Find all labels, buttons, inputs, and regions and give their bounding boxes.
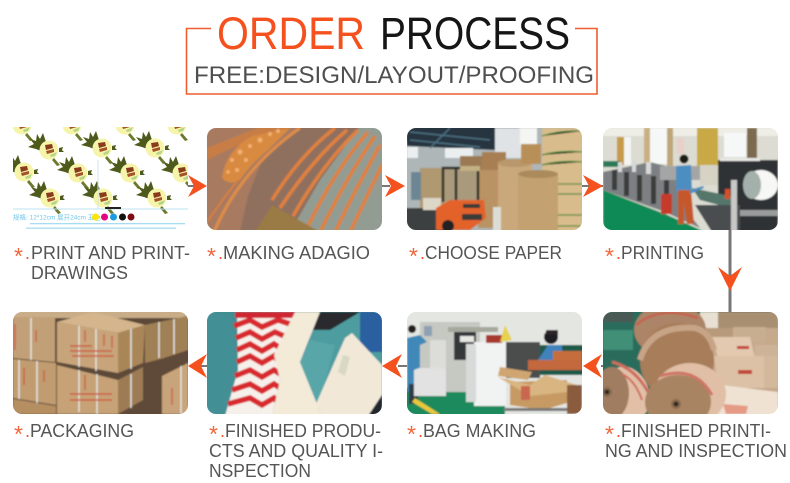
- arrow: step 4 down to 5: [718, 230, 742, 312]
- panel: print and print drawings: [13, 127, 190, 279]
- panel: making adagio: [207, 128, 382, 259]
- photo: warehouse with paper rolls: [405, 126, 585, 232]
- label: PRINTING: [621, 243, 704, 263]
- label: [209, 421, 383, 481]
- panel: packaging: [13, 312, 188, 437]
- photo: pineapple print drawing: [13, 127, 188, 229]
- label: *: [407, 421, 416, 447]
- label: *: [409, 243, 418, 269]
- arrow: step 6 to 7: [382, 354, 407, 378]
- label: NG AND INSPECTION: [605, 441, 787, 461]
- label: .: [616, 243, 621, 263]
- label: [14, 243, 190, 283]
- label: .: [220, 421, 225, 441]
- label: [605, 243, 704, 269]
- arrow: step 5 to 6: [583, 354, 603, 378]
- panel: finished products and quality inspection: [205, 310, 385, 481]
- arrow: step 7 to 8: [188, 354, 207, 378]
- label: BAG MAKING: [423, 421, 536, 441]
- label: FINISHED PRINTI-: [621, 421, 771, 441]
- panel: bag making: [407, 312, 582, 437]
- label: *: [605, 421, 614, 447]
- label: MAKING ADAGIO: [223, 243, 370, 263]
- photo: finished paper bags: [205, 310, 385, 416]
- panel: choose paper: [407, 128, 582, 259]
- label: *: [207, 243, 216, 269]
- photo: orange mould: [205, 126, 385, 232]
- label: .: [218, 243, 223, 263]
- label: .: [420, 243, 425, 263]
- title frame: [186, 28, 597, 94]
- title: process: PROCESS: [380, 8, 570, 59]
- label: NSPECTION: [209, 461, 311, 481]
- subtitle: FREE:DESIGN/LAYOUT/PROOFING: [194, 62, 594, 89]
- photo: bag making machine: [405, 310, 585, 416]
- label: .: [418, 421, 423, 441]
- label: [14, 421, 134, 447]
- label: [605, 421, 787, 461]
- arrow: step 3 to 4: [582, 175, 603, 197]
- title: order: ORDER: [217, 8, 365, 59]
- label: *: [14, 243, 23, 269]
- label: FINISHED PRODU-: [225, 421, 381, 441]
- label: .: [25, 421, 30, 441]
- photo: printing press: [601, 126, 781, 232]
- label: PACKAGING: [30, 421, 134, 441]
- photo: pineapple print drawing: 规格: 12*12cm 展开24cm 五色: [13, 212, 101, 222]
- label: CTS AND QUALITY I-: [209, 441, 383, 461]
- label: [207, 243, 370, 269]
- title block: [186, 8, 597, 94]
- label: [409, 243, 562, 269]
- arrow: step 2 to 3: [382, 175, 405, 197]
- label: CHOOSE PAPER: [425, 243, 562, 263]
- label: *: [14, 421, 23, 447]
- label: *: [605, 243, 614, 269]
- panel: finished printing and inspection: [603, 312, 786, 457]
- panel: printing: [603, 128, 778, 259]
- photo: stacked cartons: [11, 310, 191, 416]
- label: PRINT AND PRINT-: [31, 243, 190, 263]
- label: [407, 421, 536, 447]
- photo: printed kraft rolls: [603, 312, 778, 414]
- label: .: [25, 243, 30, 263]
- arrow: step 1 to 2: [188, 175, 207, 197]
- label: .: [616, 421, 621, 441]
- label: DRAWINGS: [31, 263, 128, 283]
- label: *: [209, 421, 218, 447]
